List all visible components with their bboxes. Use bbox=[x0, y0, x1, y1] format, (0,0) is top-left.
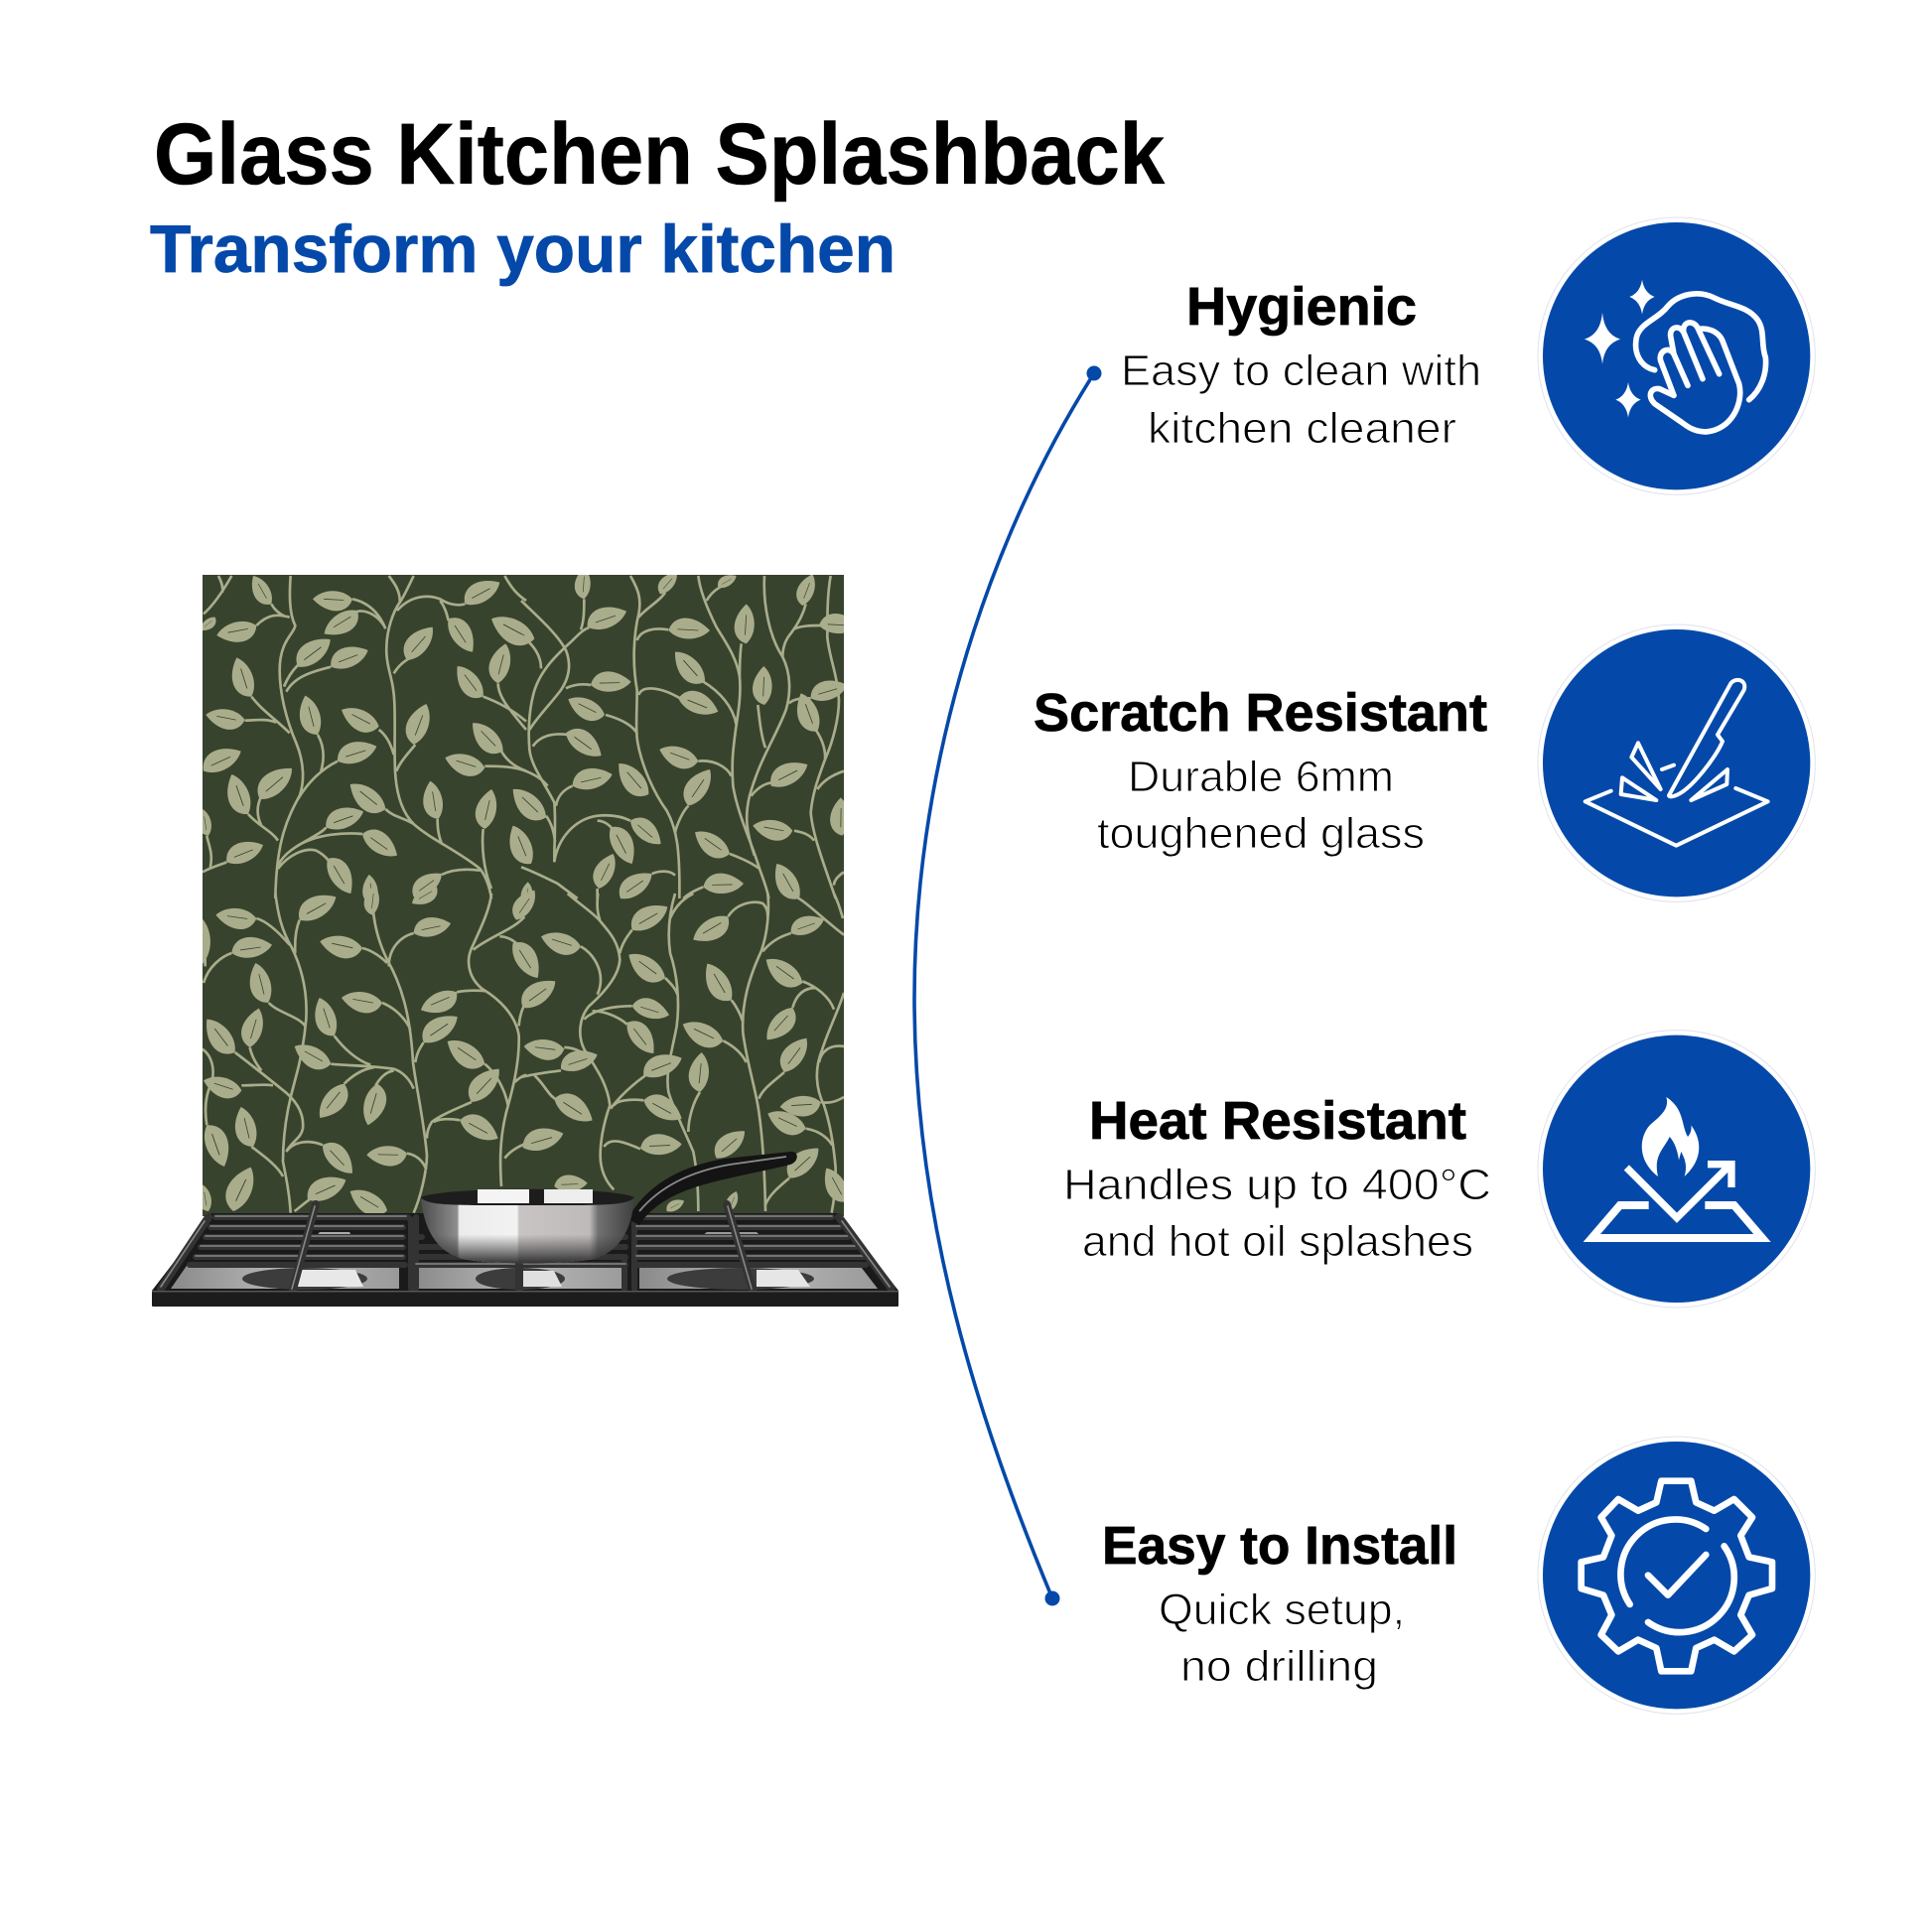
feature: hygienic bbox=[1121, 277, 1481, 453]
icon: flame on glass bbox=[1538, 1031, 1815, 1308]
frying pan bbox=[421, 1152, 797, 1264]
leaf pattern: bottom left bbox=[184, 882, 526, 1222]
connector curve bbox=[914, 365, 1102, 1606]
feature: scratch resistant: toughened glass bbox=[1097, 809, 1425, 858]
feature: scratch resistant: Scratch Resistant bbox=[1034, 683, 1487, 743]
feature: easy to install: Quick setup, bbox=[1159, 1586, 1405, 1634]
grates bbox=[161, 1204, 892, 1290]
leaf pattern: top left bbox=[195, 572, 538, 906]
feature: heat resistant: Heat Resistant bbox=[1089, 1091, 1466, 1151]
feature: easy to install bbox=[1102, 1516, 1457, 1691]
hob front edge bbox=[152, 1291, 898, 1307]
gas hob bbox=[152, 1204, 898, 1307]
burners bbox=[242, 1232, 814, 1290]
feature: easy to install: Easy to Install bbox=[1102, 1516, 1457, 1576]
feature: hygienic: kitchen cleaner bbox=[1148, 404, 1456, 453]
icon: hand wiping with sparkles bbox=[1538, 217, 1815, 494]
feature: scratch resistant bbox=[1034, 683, 1487, 858]
feature: hygienic: Easy to clean with bbox=[1121, 346, 1481, 395]
feature: heat resistant: and hot oil splashes bbox=[1082, 1217, 1473, 1266]
feature: heat resistant bbox=[1063, 1091, 1491, 1266]
feature: scratch resistant: Durable 6mm bbox=[1128, 753, 1394, 801]
feature: heat resistant: Handles up to 400°C bbox=[1063, 1161, 1491, 1209]
title: Glass Kitchen Splashback bbox=[154, 106, 1166, 203]
steel trays bbox=[171, 1263, 878, 1289]
leaf pattern: top right bbox=[510, 575, 844, 899]
subtitle: Transform your kitchen bbox=[150, 211, 896, 287]
feature: easy to install: no drilling bbox=[1180, 1642, 1378, 1691]
splashback panel with leaf pattern bbox=[184, 568, 859, 1222]
pan handle bbox=[627, 1152, 797, 1225]
leaf pattern: bottom right bbox=[506, 885, 854, 1215]
icon: knife scratching glass bbox=[1538, 624, 1815, 901]
feature: hygienic: Hygienic bbox=[1186, 277, 1417, 337]
icon: gear with check mark bbox=[1538, 1437, 1815, 1714]
